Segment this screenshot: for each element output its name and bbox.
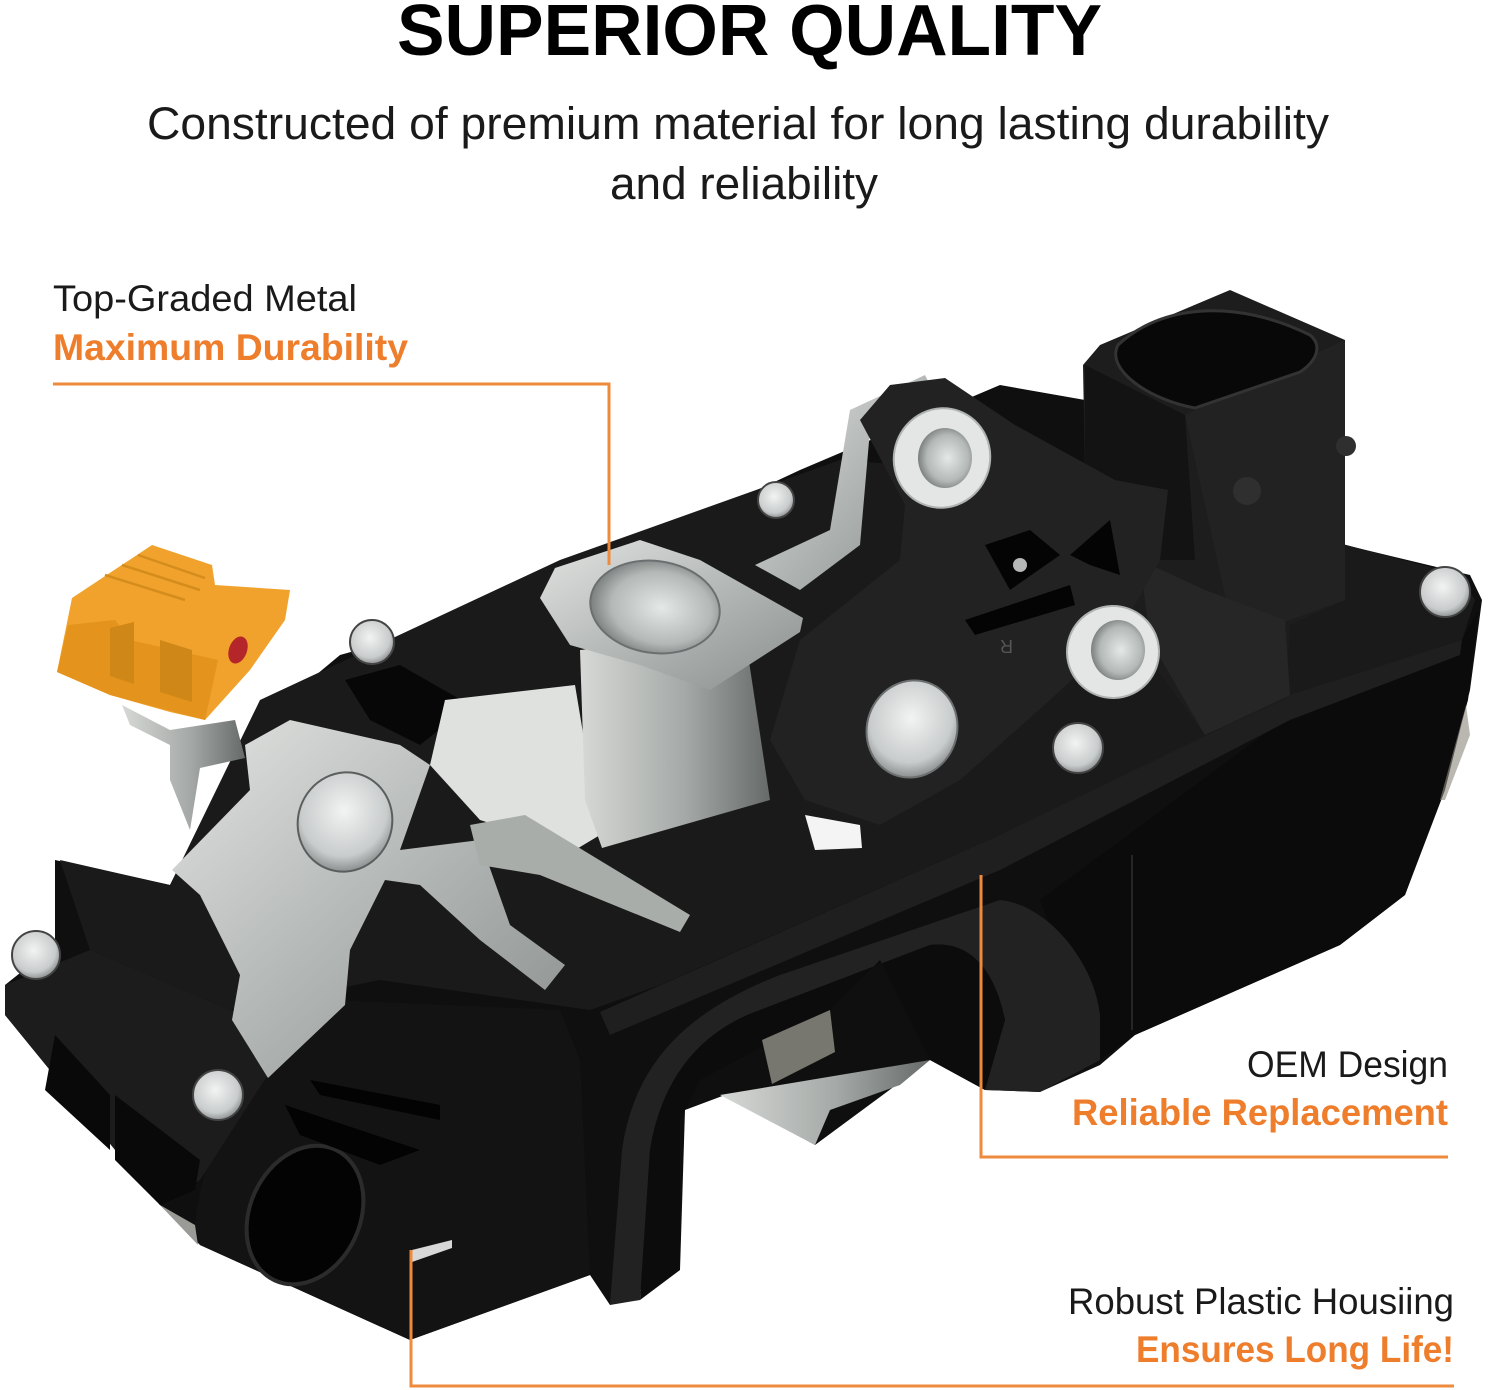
inner latch plate [720, 1060, 930, 1145]
black mount with window slots [345, 665, 470, 745]
black cam plate: R [1000, 636, 1013, 656]
product illustration: door lock actuator [5, 290, 1482, 1340]
electrical connector [1083, 290, 1356, 735]
bushing top [880, 395, 1004, 521]
right side wall [1040, 610, 1478, 1060]
callout text: top-graded metal: Maximum Durability [53, 327, 408, 368]
white slider [805, 815, 862, 850]
orange clip [57, 545, 290, 720]
callout text: top-graded metal: Top-Graded Metal [53, 278, 357, 319]
top surface [60, 460, 1475, 1010]
steel bracket with hole [540, 540, 803, 848]
screw heads [12, 482, 1470, 1120]
leader line: plastic housing [411, 1250, 1454, 1386]
callout text: top-graded metal [53, 278, 408, 368]
front lock housing [195, 1000, 590, 1340]
lower steel latch plate [172, 720, 565, 1078]
angled steel tab [470, 815, 690, 932]
steel lever strip [755, 375, 930, 590]
silver rivet [853, 668, 971, 790]
bushing lower [1054, 593, 1172, 711]
steel knob [284, 759, 406, 885]
flat steel plate [430, 685, 600, 850]
callout text: plastic housing: Robust Plastic Housiing [1068, 1281, 1454, 1322]
subtitle: Constructed of premium material for long lasting durability [147, 98, 1330, 149]
callout text: OEM design: OEM Design [1247, 1044, 1448, 1085]
callout text: OEM design: Reliable Replacement [1072, 1092, 1448, 1133]
callout text: plastic housing [1068, 1281, 1454, 1370]
callout: OEM design [981, 875, 1448, 1157]
subtitle: and reliability [610, 158, 879, 209]
callout: plastic housing [411, 1250, 1454, 1386]
bent steel arm [122, 705, 245, 830]
lock main body [5, 385, 1482, 1340]
subtitle [147, 98, 1330, 209]
leader line: top-graded metal [53, 384, 609, 565]
callout text: OEM design [1072, 1044, 1448, 1133]
sealing gasket [585, 900, 1100, 1305]
black cam plate [770, 378, 1168, 825]
callout: top-graded metal [53, 278, 609, 565]
callout text: plastic housing: Ensures Long Life! [1136, 1329, 1454, 1370]
leader line: OEM design [981, 875, 1448, 1157]
